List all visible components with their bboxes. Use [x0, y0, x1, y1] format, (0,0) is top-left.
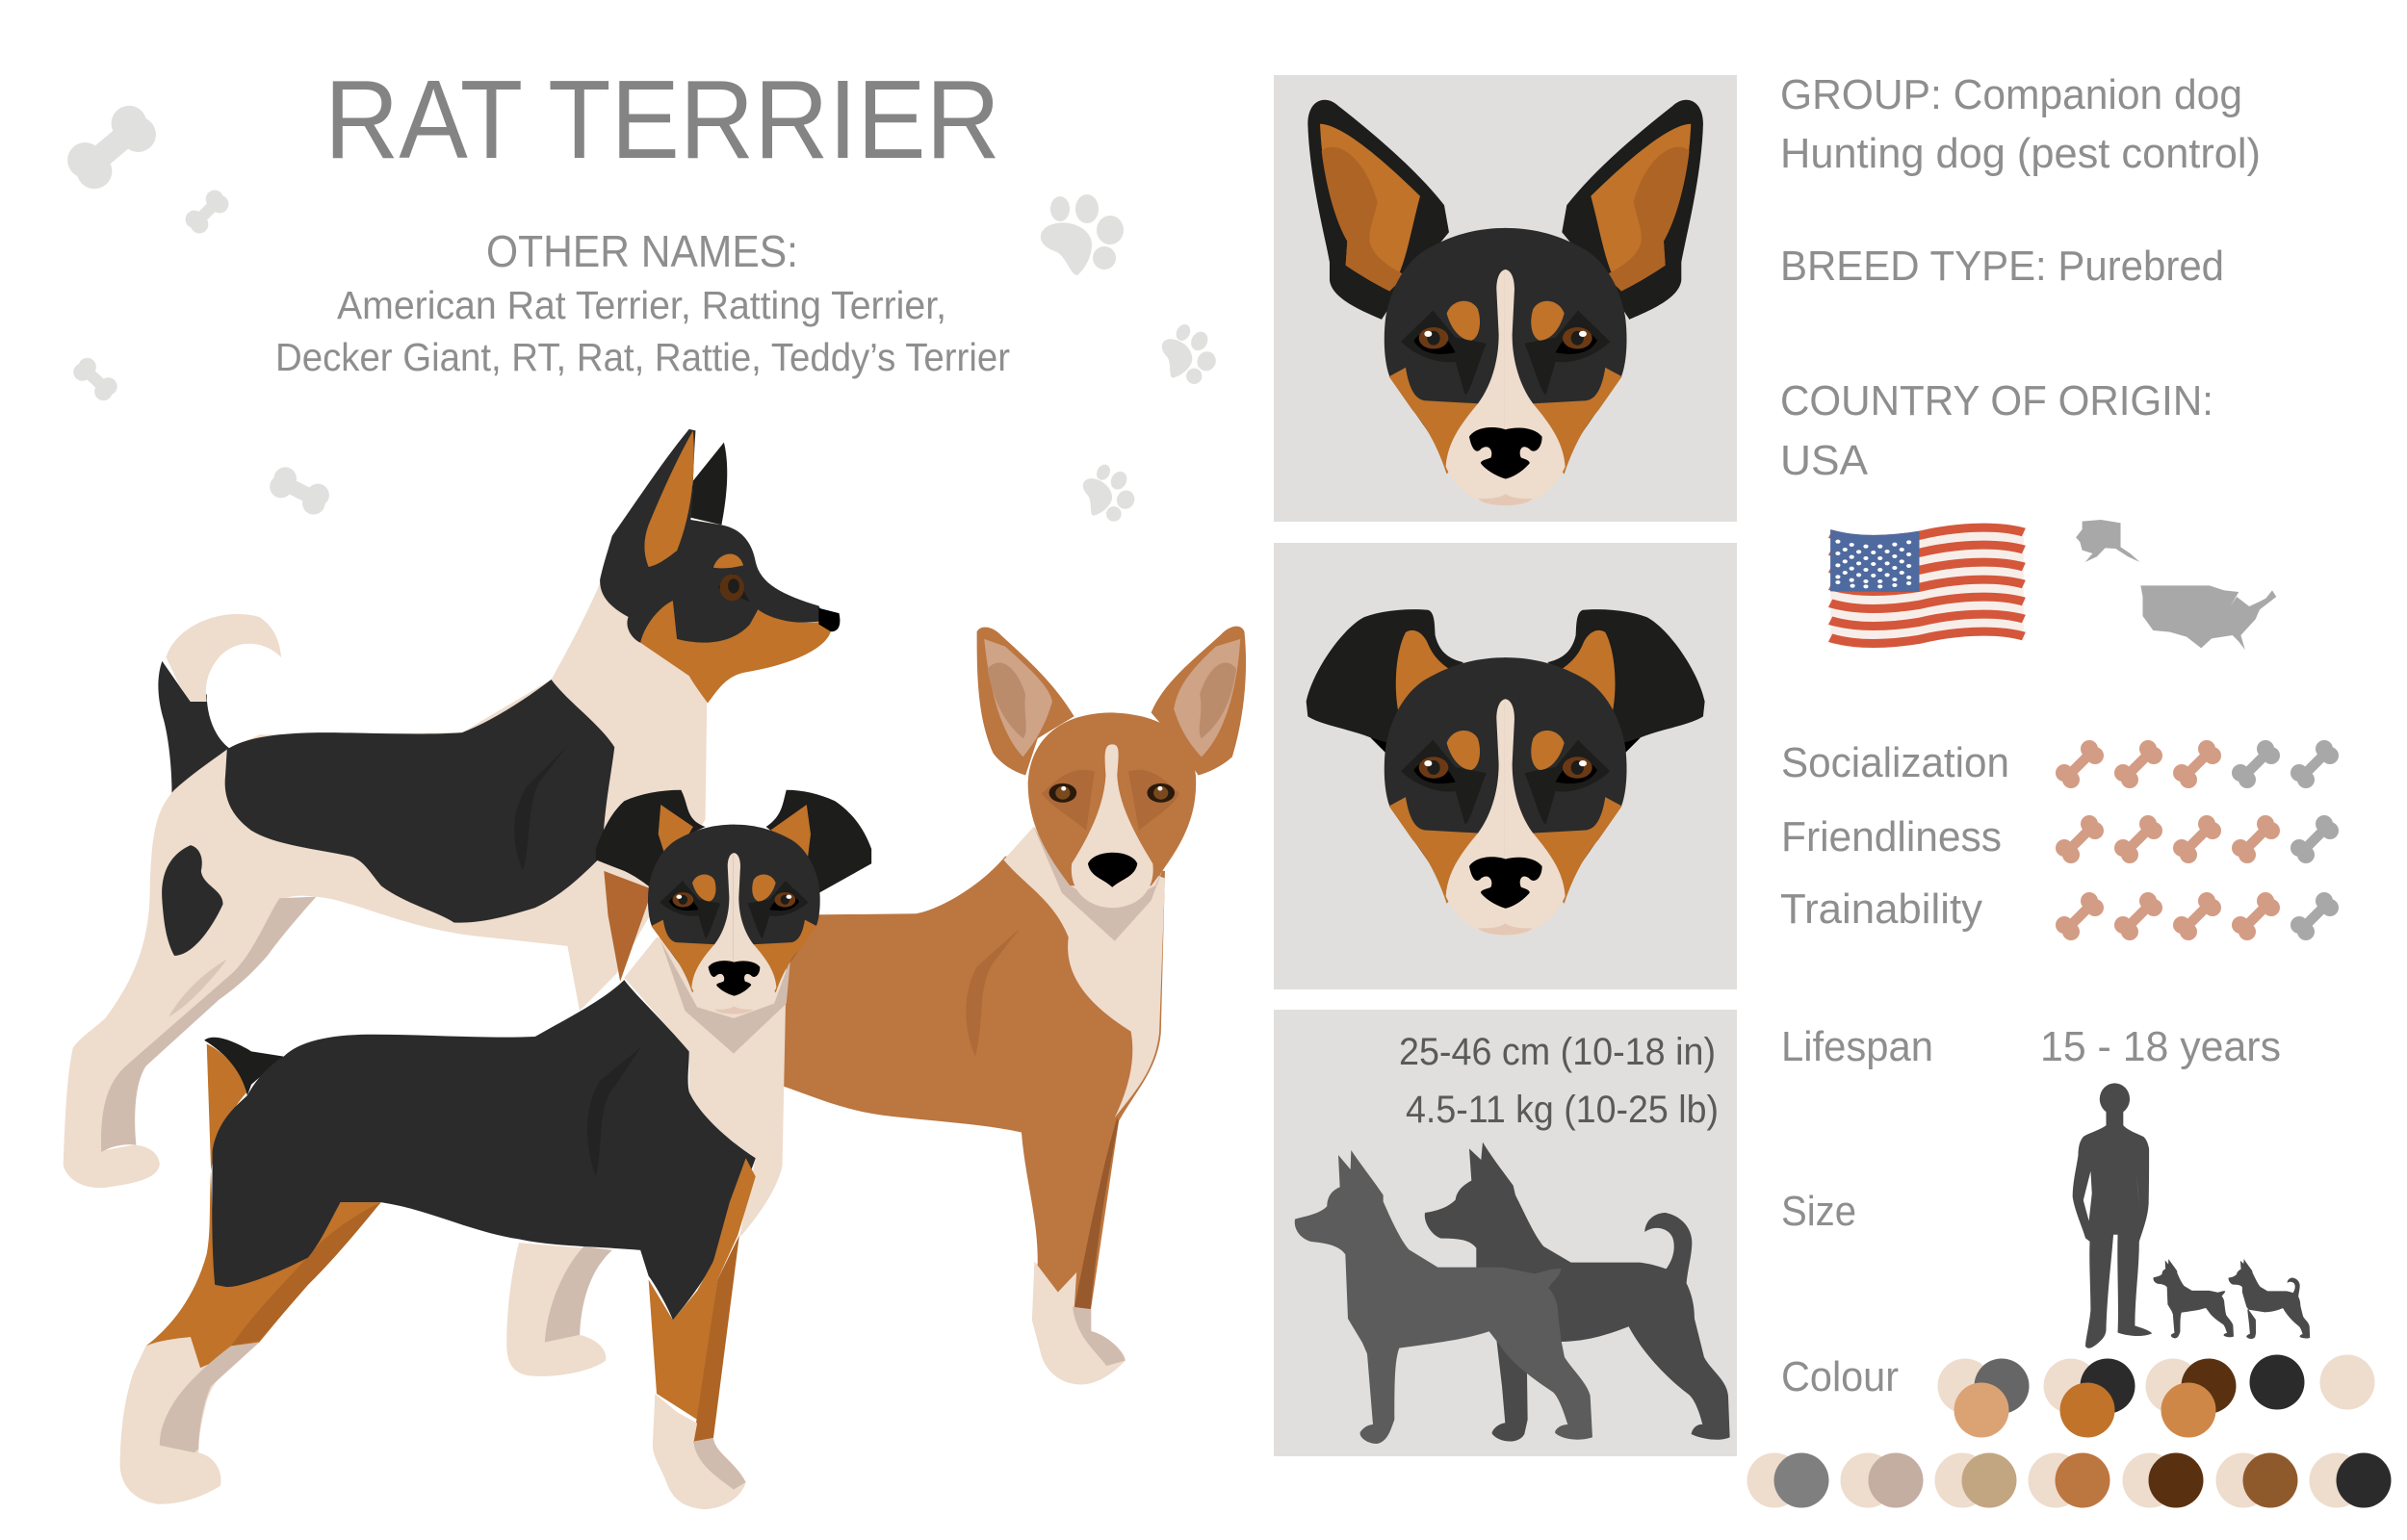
socialization label: Socialization — [1781, 739, 2009, 786]
icon: small dog silhouette right — [2229, 1259, 2310, 1339]
trainability bones: 4 of 5 — [2056, 892, 2339, 940]
icon: lower paw — [1072, 458, 1144, 529]
icon: USA map — [2076, 520, 2276, 650]
dog: red and cream, standing behind right — [506, 627, 1246, 1384]
icon: left bone — [73, 357, 117, 401]
panel: folded ear head — [1274, 543, 1737, 989]
other names heading: OTHER NAMES: — [486, 226, 798, 276]
decorative bones and paws — [65, 101, 1226, 529]
weight text: 4.5-11 kg (10-25 lb) — [1406, 1089, 1719, 1131]
breed type: BREED TYPE: Purebred — [1780, 243, 2224, 290]
size label: Size — [1781, 1188, 1856, 1235]
icon: USA flag — [1830, 524, 2024, 649]
icon: large paw — [1041, 194, 1124, 275]
icon: small bone — [186, 191, 228, 233]
face — [1385, 657, 1627, 936]
icon: large bone — [65, 101, 158, 193]
icon: human silhouette — [2073, 1083, 2152, 1348]
icon: lower bone — [265, 456, 334, 526]
swatch: cream fawn — [1935, 1453, 2016, 1507]
dog: cream and black tricolour, standing behind left — [64, 429, 840, 1188]
group line 1: GROUP: Companion dog — [1780, 71, 2242, 118]
country of origin: COUNTRY OF ORIGIN: — [1780, 377, 2213, 424]
swatch: cream black — [2309, 1453, 2392, 1507]
illustration: three dogs — [64, 429, 1246, 1509]
swatch: cream brown — [2216, 1453, 2297, 1507]
swatch: cream — [2320, 1355, 2374, 1409]
Alaska — [2076, 520, 2139, 562]
icon: small dog silhouette left — [2153, 1259, 2234, 1338]
group and breed text — [1780, 71, 2261, 484]
swatch: cream red — [2028, 1453, 2110, 1507]
dog: black and tan, standing in front — [120, 790, 871, 1509]
swatch: cream chocolate — [2122, 1453, 2203, 1507]
swatch: cream taupe — [1841, 1453, 1924, 1507]
colour swatches — [1747, 1355, 2392, 1507]
USA: USA — [1780, 437, 1869, 484]
size comparison — [2073, 1083, 2310, 1348]
lifespan value: 15 - 18 years — [2040, 1023, 2281, 1070]
mainland — [2140, 585, 2276, 650]
ratings — [1780, 739, 2339, 940]
icon: middle paw — [1151, 318, 1226, 393]
other names text block — [275, 226, 1010, 379]
other names line 1: American Rat Terrier, Ratting Terrier, — [337, 283, 946, 327]
colour label: Colour — [1781, 1353, 1899, 1400]
socialization bones: 3 of 5 — [2056, 740, 2339, 788]
panel: upright ear head — [1274, 75, 1737, 522]
friendliness bones: 4 of 5 — [2056, 815, 2339, 863]
group line 2: Hunting dog (pest control) — [1780, 130, 2261, 177]
swatch: black — [2249, 1355, 2305, 1409]
other names line 2: Decker Giant, RT, Rat, Rattie, Teddy’s Terrier — [275, 335, 1010, 379]
swatch: cream black tan — [2043, 1359, 2135, 1438]
title: RAT TERRIER — [324, 57, 1000, 182]
height text: 25-46 cm (10-18 in) — [1399, 1031, 1716, 1073]
friendliness label: Friendliness — [1781, 813, 2002, 860]
left folded ear — [1307, 609, 1463, 757]
lifespan label: Lifespan — [1781, 1023, 1933, 1070]
swatch: cream brown tan — [2145, 1359, 2236, 1438]
left ear — [1307, 100, 1449, 320]
swatch: cream grey tan — [1937, 1359, 2030, 1438]
trainability label: Trainability — [1780, 886, 1982, 933]
dog silhouettes — [1295, 1142, 1730, 1444]
right ear — [1562, 100, 1703, 320]
right folded ear — [1547, 609, 1705, 757]
face — [1385, 228, 1627, 506]
panel: size and weight silhouettes — [1274, 1010, 1737, 1456]
swatch: cream grey — [1747, 1453, 1829, 1507]
